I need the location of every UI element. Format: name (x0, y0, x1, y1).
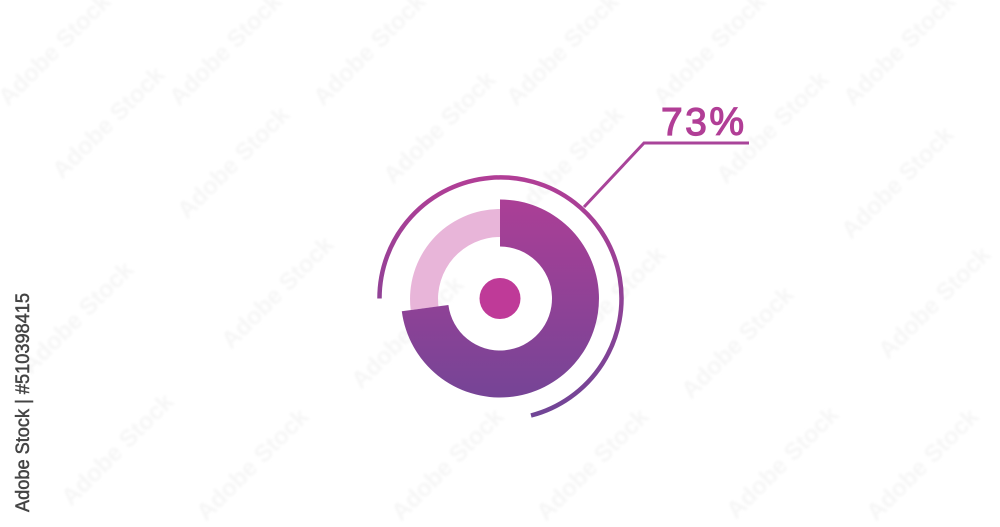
center dot (480, 278, 520, 319)
watermark pattern: Adobe Stock (836, 121, 960, 244)
leader line (584, 143, 749, 207)
watermark pattern: Adobe Stock (378, 66, 502, 189)
watermark pattern: Adobe Stock (861, 403, 985, 526)
watermark pattern: Adobe Stock (531, 403, 655, 526)
watermark pattern: Adobe Stock (47, 61, 171, 184)
watermark pattern: Adobe Stock (386, 403, 510, 526)
light remainder ring segment (410, 209, 500, 310)
watermark pattern: Adobe Stock (56, 388, 180, 511)
watermark pattern: Adobe Stock (16, 256, 140, 379)
watermark pattern: Adobe Stock (216, 231, 340, 354)
dark 73 percent ring segment (402, 200, 599, 398)
watermark pattern: Adobe Stock (172, 101, 296, 224)
watermark pattern: Adobe Stock (548, 241, 672, 364)
watermark pattern: Adobe Stock (346, 271, 470, 394)
watermark pattern: Adobe Stock (676, 281, 800, 404)
watermark pattern: Adobe Stock (873, 241, 997, 364)
percentage value: 73% (661, 101, 744, 144)
watermark pattern: Adobe Stock (711, 66, 835, 189)
watermark pattern: Adobe Stock (191, 403, 315, 526)
watermark pattern: Adobe Stock (721, 401, 845, 524)
watermark pattern: Adobe Stock (506, 101, 630, 224)
outer arc (379, 177, 621, 416)
stock id label: Adobe Stock | #510398415 (13, 293, 34, 512)
